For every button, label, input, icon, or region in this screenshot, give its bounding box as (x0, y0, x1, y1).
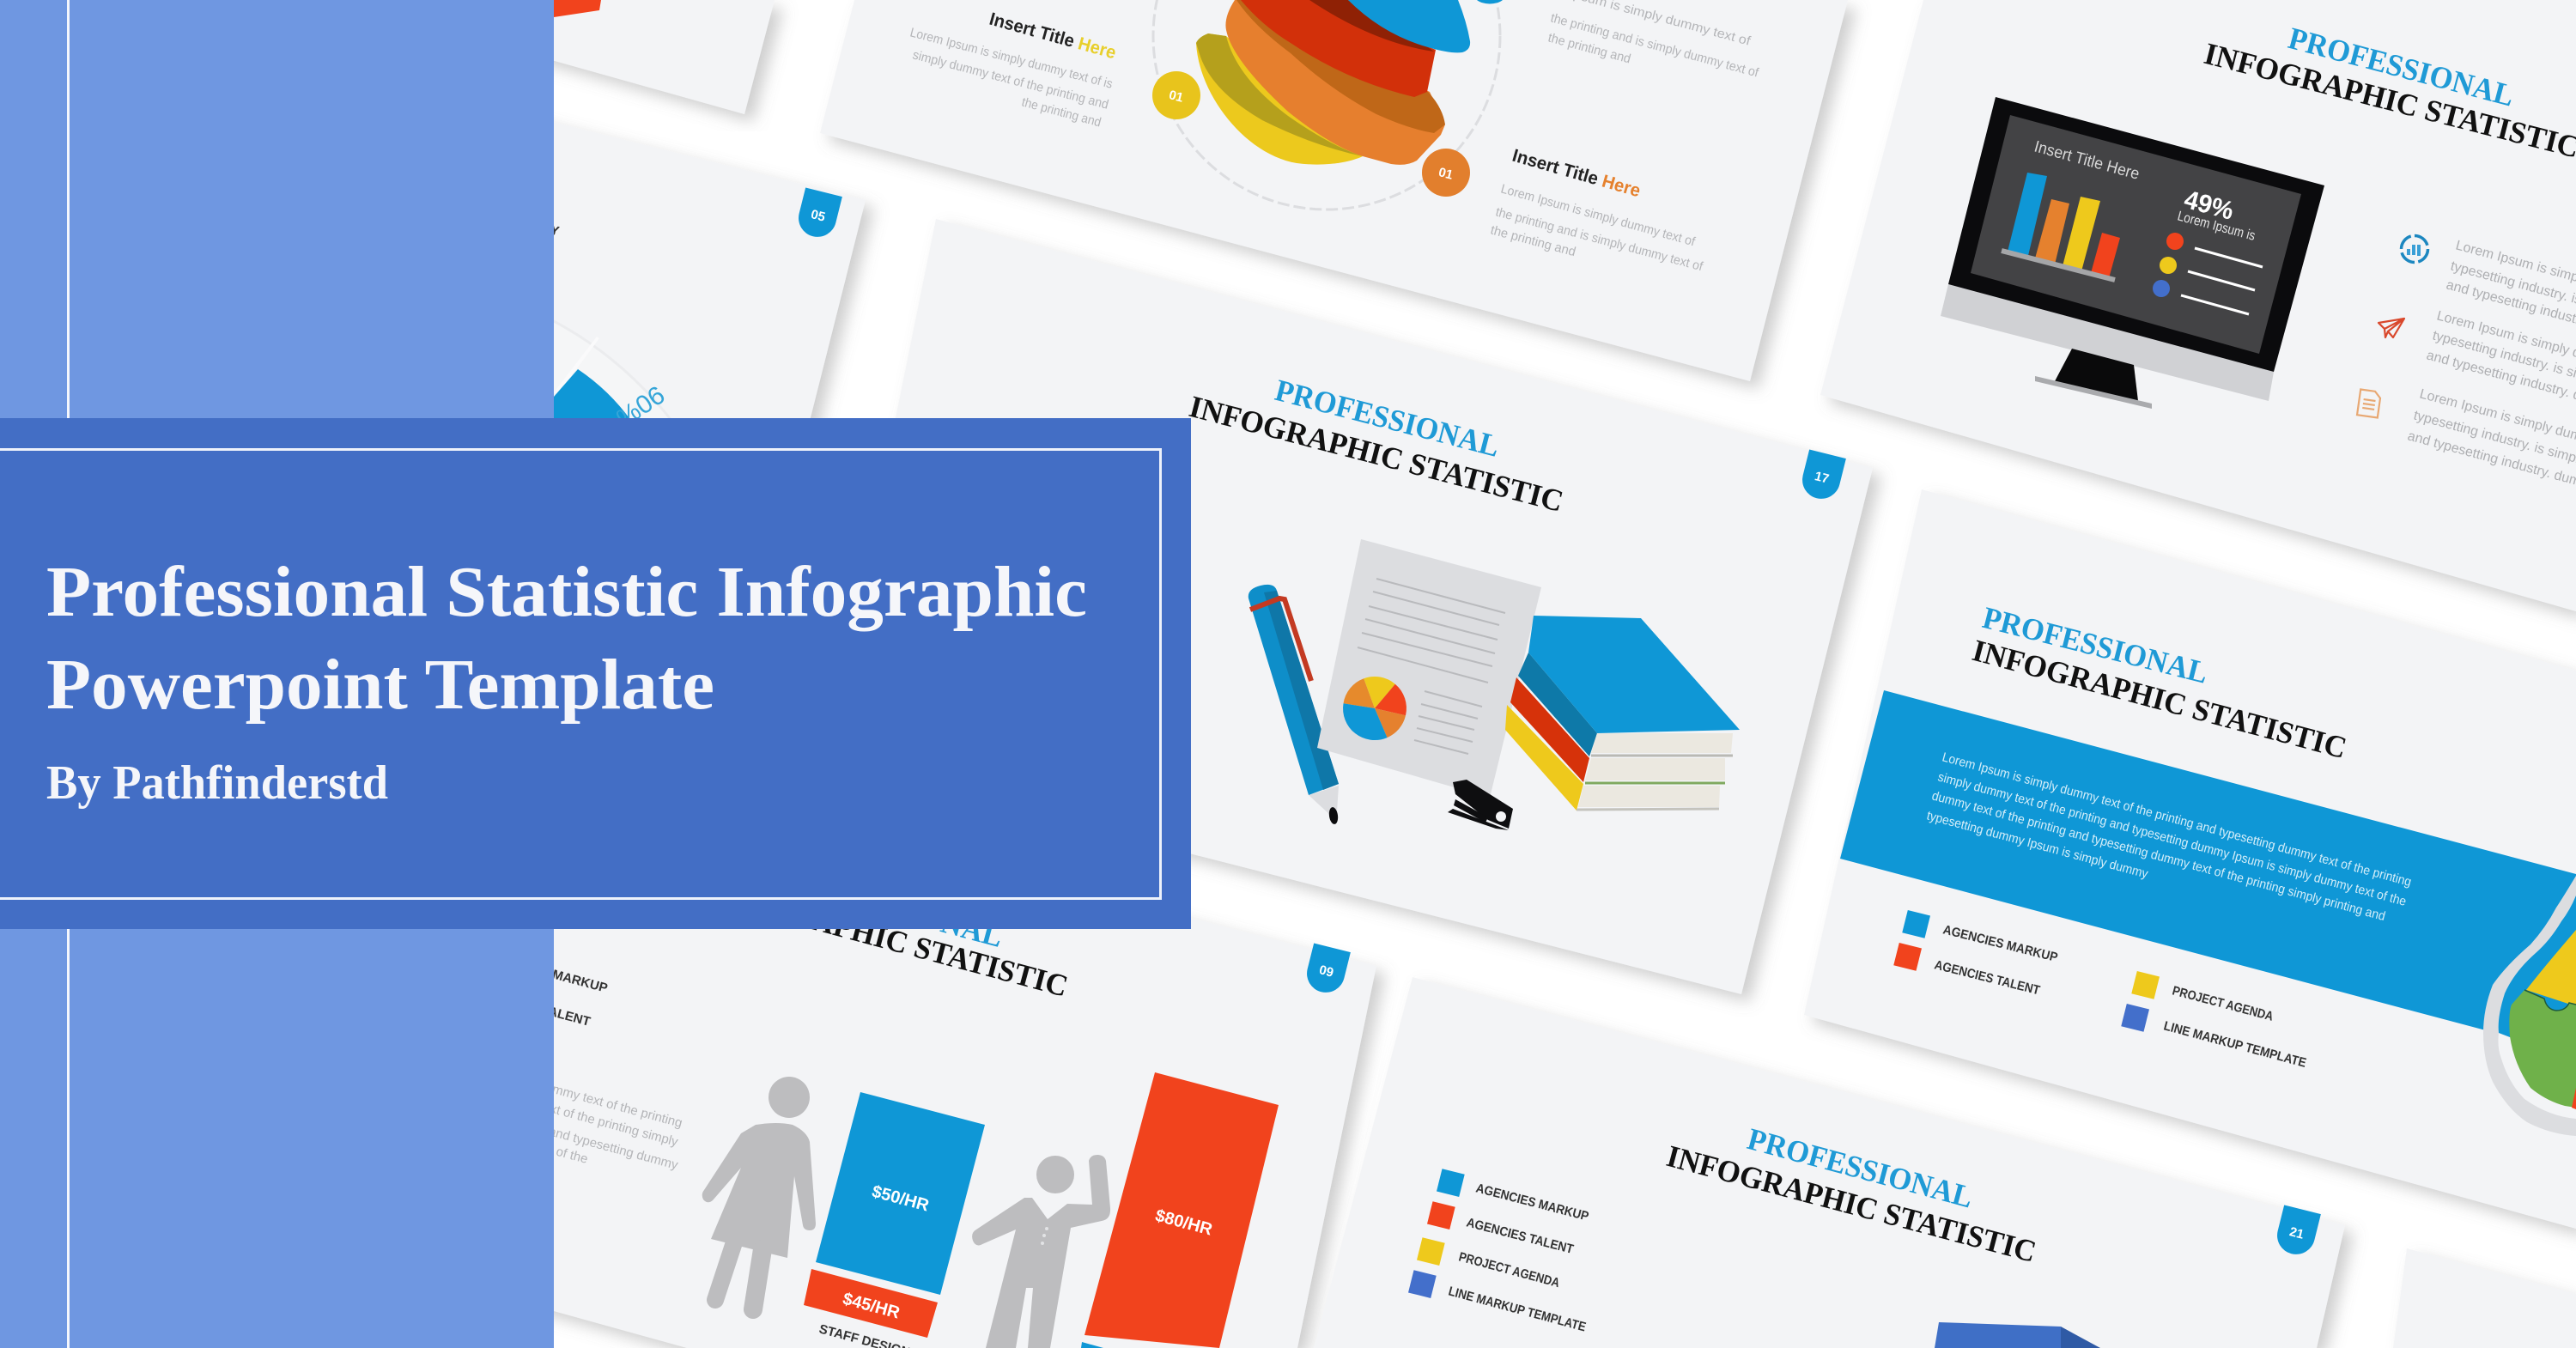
page badge 09: 09 (1317, 962, 1335, 981)
left stripe (0, 0, 554, 1348)
stacked layers illustration (1196, 0, 1470, 165)
marker 01 yellow (1152, 71, 1200, 119)
pie chart fragment (481, 292, 678, 432)
bar: $45/HR (804, 1269, 938, 1338)
right text block: Insert Title Here (1510, 146, 1643, 201)
legend: LINE MARKUP TEMPLATE (1447, 1284, 1588, 1335)
monitor illustration (1941, 97, 2324, 409)
slide heading: PROFESSIONAL (1979, 600, 2212, 690)
left text block: Insert Title Here (987, 9, 1118, 63)
slide heading: INFOGRAPHIC STATISTIC (1663, 1139, 2039, 1269)
legend (1893, 910, 2308, 1071)
left text block: the printing and (1020, 94, 1103, 130)
pie chart (1343, 677, 1406, 740)
page badge 05: 05 (809, 207, 827, 225)
left text block: Lorem Ipsum is simply dummy text of is (908, 25, 1115, 92)
slide heading: INFOGRAPHIC STATISTIC (1186, 389, 1567, 519)
marker 01 orange: 01 (1437, 165, 1455, 183)
woman figure (702, 1077, 816, 1309)
right text block: the printing and (1489, 222, 1577, 259)
body text fragment: Ipsum is simply dummy text of the printing (448, 1054, 683, 1131)
text block 3 (2406, 386, 2576, 505)
legend (1408, 1169, 1590, 1335)
band text: Lorem Ipsum is simply dummy text of the printing and typesetting dummy text of the printing (1941, 750, 2413, 890)
pie chart fragment: 90% (611, 380, 670, 432)
page badge 09 (1303, 943, 1351, 997)
body text fragment: dummy text of the (487, 1126, 589, 1167)
books illustration (1505, 616, 1740, 811)
blue band (1840, 690, 2576, 1054)
title: Powerpoint Template (46, 645, 714, 725)
stapler icon (1448, 780, 1513, 830)
band text: typesetting dummy Ipsum is simply dummy (1925, 808, 2150, 882)
byline: By Pathfinderstd (46, 756, 388, 810)
right text block: Lorem Ipsum is simply dummy text of (1499, 181, 1698, 250)
marker 01 orange (1422, 149, 1470, 197)
right text block (1489, 146, 1705, 275)
dashed orbit circle (1153, 0, 1500, 209)
right text block: the printing and is simply dummy text of (1494, 204, 1705, 275)
icon: paper plane (2379, 319, 2404, 337)
title (46, 552, 1087, 725)
slide heading: PROFESSIONAL (1272, 373, 1503, 464)
panel: monitor slide (1820, 0, 2576, 611)
man figure (972, 1155, 1110, 1348)
banner (0, 418, 1191, 929)
icon: document (2357, 389, 2381, 418)
bar: $45/HR: $45/HR (841, 1290, 902, 1323)
legend: AGENCIES TALENT (1465, 1215, 1575, 1257)
page badge 21 (2273, 1205, 2321, 1259)
body text fragment: simply dummy text of the printing simply (455, 1077, 680, 1150)
slide heading: INFOGRAPHIC STATISTIC (691, 871, 1072, 1004)
top right text block: the printing and (1546, 30, 1632, 66)
bar: $80/HR (1081, 1072, 1279, 1348)
slide heading: PROFESSIONAL (1744, 1121, 1977, 1215)
text block 1 (2445, 238, 2576, 354)
monitor illustration: Lorem Ipsum is (2176, 209, 2257, 244)
body text fragment (448, 1054, 683, 1173)
bar: $80/HR: $80/HR (1153, 1206, 1215, 1240)
monitor illustration: 49% (2181, 185, 2237, 226)
blue 3D box fragment (1935, 1322, 2100, 1348)
band text: dummy text of the printing and typesetting dummy text of the printing simply printing and (1930, 788, 2387, 924)
icon: chart target (2401, 235, 2428, 263)
page badge 17: 17 (1813, 469, 1831, 487)
water drop puzzle (2483, 876, 2576, 1136)
panel: insert title slide (820, 0, 1848, 381)
bar: $50/HR: $50/HR (870, 1182, 932, 1216)
title: Professional Statistic Infographic (46, 552, 1087, 632)
left text block: simply dummy text of the printing and (911, 47, 1110, 112)
legend fragments (471, 949, 609, 1029)
legend: AGENCIES MARKUP (1474, 1181, 1590, 1224)
legend fragments: AGENCIES TALENT (471, 984, 592, 1029)
red chart fragment (554, 0, 601, 17)
panel: next slide corner (2393, 1248, 2576, 1348)
band text: simply dummy text of the printing and typesetting dummy Ipsum is simply dummy text of the (1936, 769, 2408, 909)
legend: PROJECT AGENDA (1457, 1249, 1561, 1290)
pen illustration (1249, 585, 1339, 825)
panel: slide 17 (826, 219, 1873, 994)
legend fragments: AGENCIES MARKUP (483, 949, 609, 996)
panel: slide 05 (343, 91, 866, 601)
legend: AGENCIES MARKUP (1941, 922, 2059, 965)
small blue marker (1477, 0, 1503, 3)
monitor illustration: Insert Title Here (2032, 138, 2142, 184)
marker 01 yellow: 01 (1167, 88, 1185, 106)
text block 2 (2425, 308, 2576, 424)
panel: agenda slide (1804, 489, 2576, 1229)
inner frame (0, 450, 1161, 898)
body text fragment: the printing and typesetting dummy (482, 1107, 680, 1173)
panel: top-left slide (429, 0, 775, 114)
bar: $50/HR (816, 1092, 985, 1295)
clipped label fragment: Y (549, 222, 561, 239)
page badge 21: 21 (2287, 1224, 2306, 1242)
document illustration (1317, 539, 1541, 798)
slide heading: INFOGRAPHIC STATISTIC (1969, 633, 2350, 765)
legend: AGENCIES TALENT (1933, 957, 2041, 998)
page badge 05 (794, 187, 842, 241)
slide heading: PROFESSIONAL (2285, 21, 2518, 113)
legend: LINE MARKUP TEMPLATE (2162, 1018, 2308, 1071)
panel: slide 09 (343, 721, 1376, 1348)
panel: slide 21 (1314, 977, 2345, 1348)
top right text block: the printing and is simply dummy text of (1549, 10, 1761, 81)
left text block (908, 9, 1118, 130)
page badge 17 (1798, 449, 1846, 503)
slide heading: PROFESSIONAL (775, 861, 1006, 954)
legend: PROJECT AGENDA (2171, 983, 2275, 1024)
